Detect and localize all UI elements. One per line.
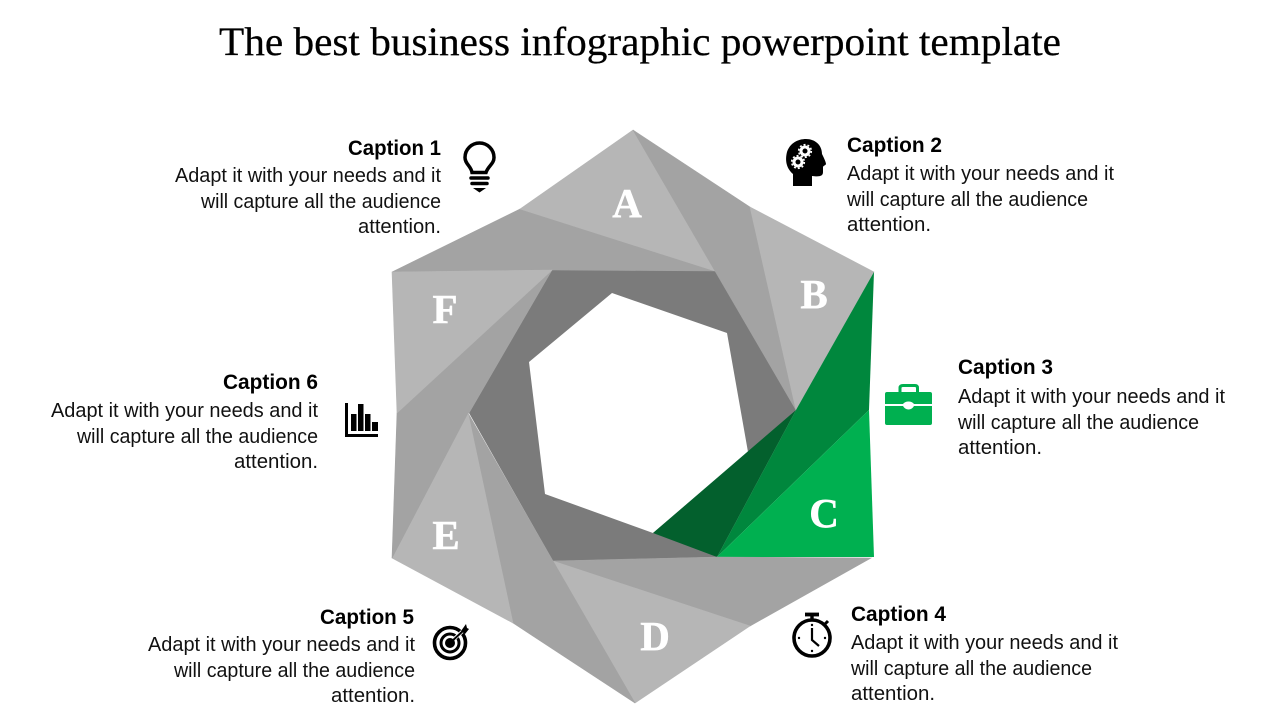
- icon: stopwatch: [794, 614, 830, 656]
- caption 6: will capture all the audience: [76, 426, 318, 448]
- caption 2: attention.: [847, 214, 931, 236]
- caption 3: Caption 3: [958, 356, 1053, 379]
- caption 3: attention.: [958, 437, 1042, 459]
- caption 3: [957, 356, 1225, 459]
- caption 6: [51, 371, 318, 473]
- icon: briefcase: [885, 386, 932, 425]
- caption 5: Caption 5: [320, 606, 414, 629]
- caption 6: Caption 6: [223, 371, 318, 394]
- icon: head with gears: [786, 139, 826, 186]
- caption 1: Caption 1: [348, 137, 441, 160]
- caption 2: Caption 2: [847, 134, 942, 157]
- hexagon diagram: [392, 130, 874, 703]
- caption 5: Adapt it with your needs and it: [148, 634, 415, 656]
- segment E: [392, 413, 635, 703]
- segment F: [392, 270, 552, 558]
- caption 3: Adapt it with your needs and it: [958, 386, 1225, 408]
- caption 5: [148, 606, 415, 707]
- caption 4: Caption 4: [851, 603, 946, 626]
- caption 4: will capture all the audience: [850, 658, 1092, 680]
- segment B: B: [800, 271, 828, 317]
- caption 1: Adapt it with your needs and it: [175, 165, 441, 187]
- segment A: A: [612, 180, 642, 226]
- segment C (highlighted green): C: [809, 490, 839, 536]
- dark inner ring: [469, 270, 796, 561]
- caption 4: Adapt it with your needs and it: [851, 632, 1118, 654]
- caption 6: Adapt it with your needs and it: [51, 400, 318, 422]
- caption 2: [846, 134, 1114, 236]
- segment D: D: [640, 613, 670, 659]
- caption 3: will capture all the audience: [957, 412, 1199, 434]
- caption 1: attention.: [358, 216, 441, 238]
- segment A: [392, 130, 715, 272]
- caption 2: will capture all the audience: [846, 189, 1088, 211]
- segment B: [633, 130, 874, 410]
- caption 5: attention.: [331, 685, 415, 707]
- icon: lightbulb: [465, 143, 494, 192]
- caption 1: [175, 137, 441, 238]
- caption 1: will capture all the audience: [200, 191, 441, 213]
- segment E: E: [432, 512, 460, 558]
- icon: target with arrow: [434, 624, 469, 658]
- segment D: [553, 557, 871, 703]
- caption 4: [850, 603, 1118, 705]
- caption 2: Adapt it with your needs and it: [847, 163, 1114, 185]
- segment C (highlighted green): [653, 272, 874, 557]
- title: The best business infographic powerpoint template: [219, 19, 1061, 64]
- segment F: F: [432, 286, 458, 332]
- caption 5: will capture all the audience: [173, 660, 415, 682]
- caption 6: attention.: [234, 451, 318, 473]
- icon: bar chart: [345, 403, 378, 437]
- caption 4: attention.: [851, 683, 935, 705]
